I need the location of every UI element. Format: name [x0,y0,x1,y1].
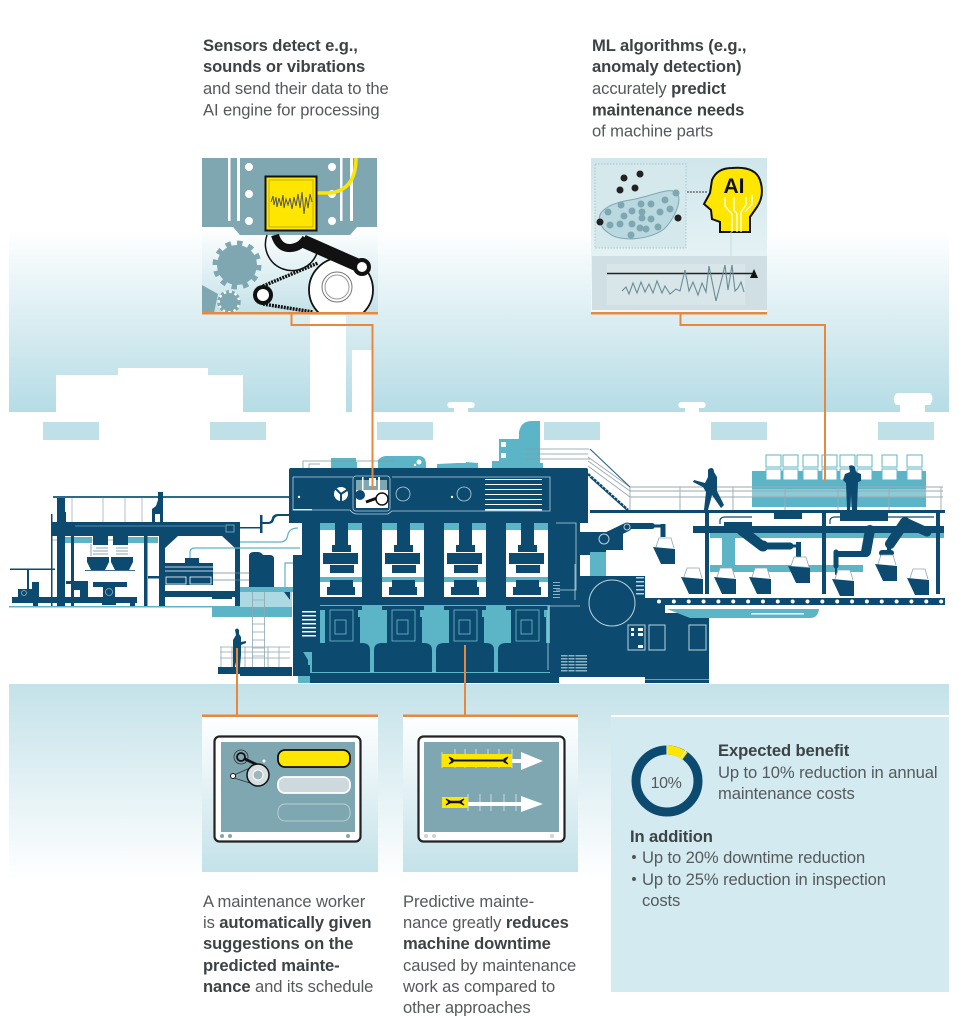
flywheel [589,580,635,626]
icon: small gear [202,285,240,313]
rule: AI panel orange [591,312,767,314]
chart: sensor signal [592,256,767,310]
chart: anomaly cluster [595,164,686,248]
teal conveyors [590,530,944,618]
icon: AI head [704,168,762,232]
background: pale window row [43,422,934,440]
text: worker caption: is automatically given [203,913,371,932]
icon: pulley [230,750,269,786]
robot arm: left [599,524,663,544]
text: sensors caption: and send their data to the [203,79,389,98]
rule: sensor panel orange [202,312,378,314]
buckets [653,538,929,596]
left upper rail [52,497,142,540]
background: lower band [9,684,949,880]
text: ML caption: accurately predict [592,79,726,98]
panel: worker suggestions [202,714,378,872]
panel: AI illustration [591,158,767,313]
text: in addition: Up to 25% reduction in inspection [642,870,886,889]
figure: maintenance worker [233,628,246,667]
text: worker caption: nance and its schedule [203,977,373,996]
text: worker caption: predicted mainte- [203,956,340,975]
icon: tablet [214,736,360,842]
text: in addition: Up to 20% downtime reduction [642,848,865,867]
connector: AI to machine [680,313,825,482]
icon: large gear [215,243,259,287]
illustration: factory left section [9,492,300,676]
text: expected benefit: Up to 10% reduction in annual [718,763,937,782]
vents and panel lines [293,479,542,636]
robot arm: right lower [836,530,870,574]
text: in addition: In addition [630,827,713,846]
text: sensors caption: Sensors detect e.g., [203,36,358,55]
text: expected benefit: maintenance costs [718,784,855,803]
text: sensors caption: AI engine for processing [203,100,380,120]
text: ML caption: maintenance needs [592,100,744,120]
text: downtime caption: Predictive mainte- [403,892,534,911]
teal lower body [301,604,551,674]
text: ML caption: of machine parts [592,122,713,140]
illustration: right factory section [580,449,945,683]
chart: 10 percent donut: 10% [651,775,682,792]
background: white building silhouettes [56,315,932,412]
panel: downtime comparison [403,714,578,872]
bar: short maintenance [442,794,543,812]
connector: machine to panel [464,645,466,716]
icon: AI head: AI [724,175,744,198]
text: worker caption [203,892,373,996]
text: ML caption: anomaly detection) [592,57,741,76]
teal background building [752,455,926,507]
text: in addition: costs [642,891,680,910]
gauge [334,487,348,501]
icon: yellow sensor [266,158,356,230]
panel: sensor illustration [202,158,378,313]
railings and stairs [588,457,943,510]
text: ML caption [592,36,746,140]
chart: 10 percent donut [636,745,698,812]
figure: standing operator [843,465,861,510]
control panels [628,625,706,650]
text: downtime caption [402,892,576,1016]
robot arm: right upper [882,522,927,553]
icon: pulley and belt [253,235,373,313]
text: worker caption: suggestions on the [203,934,353,953]
text: downtime caption: caused by maintenance [403,956,576,975]
figure: walking inspector [693,468,724,510]
text: downtime caption: work as compared to [402,977,555,996]
text: sensors caption: sounds or vibrations [203,57,365,76]
text: in addition [630,827,886,910]
icon: tablet [418,736,564,842]
bar: long maintenance [442,749,543,770]
robot arm: centre [741,530,798,557]
back teal tanks [331,421,543,468]
text: downtime caption: machine downtime [403,934,551,953]
text: sensors caption [203,36,389,120]
conveyor rollers [659,600,944,604]
illustration: main press machine [289,421,709,683]
sensor location inset [353,476,390,511]
connector: worker to panel [236,648,238,716]
panel: expected benefit [611,715,949,992]
text: expected benefit [718,741,937,803]
text: downtime caption: nance greatly reduces [403,913,569,932]
figure on beam [152,492,163,522]
text: ML caption: ML algorithms (e.g., [592,36,746,55]
background: sky band [9,230,949,412]
small vents [553,582,587,672]
text: expected benefit: Expected benefit [718,741,850,760]
connector: sensor to machine [292,313,372,490]
text: worker caption: A maintenance worker [203,892,366,911]
